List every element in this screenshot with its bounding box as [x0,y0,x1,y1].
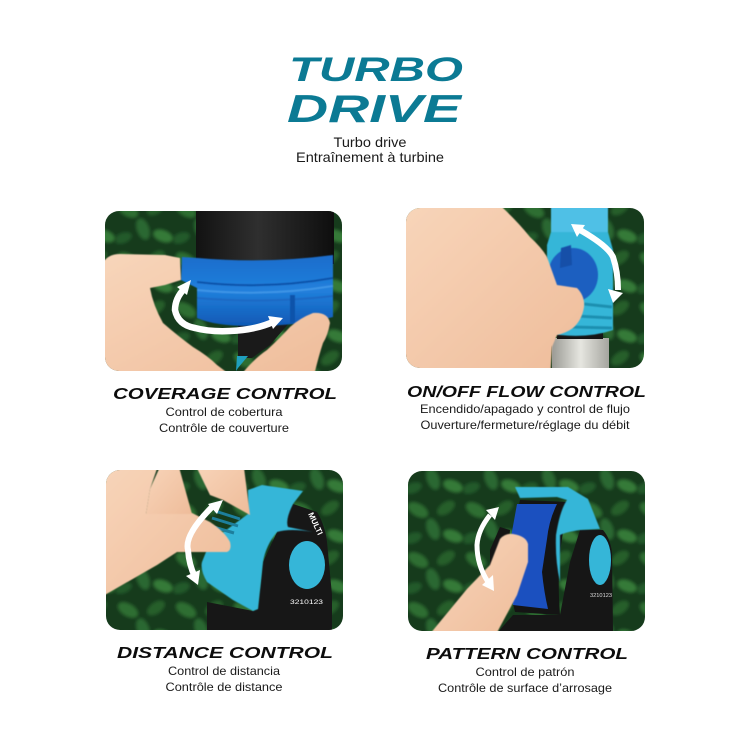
arrow: pattern [477,507,499,591]
subtitle: Turbo drive [334,134,407,150]
spout below the ring [236,322,290,371]
text: coverage control translations [159,405,289,435]
dial [289,541,325,589]
text: pattern control translations: Control de patrón [476,665,574,679]
text: distance control translations: Contrôle de distance [166,680,283,694]
panel: flow control photo [406,208,644,368]
text: flow control translations: Ouverture/fermeture/réglage du débit [420,418,630,432]
blue ring [181,255,333,326]
dial [589,535,611,585]
black band [557,333,603,339]
silver fitting [552,338,609,368]
dial numbers: 3210123 [590,593,612,599]
arrow: valve [571,224,623,303]
text: flow control translations: Encendido/apagado y control de flujo [420,402,630,416]
valve body [547,200,613,336]
finger [432,533,529,631]
light blue deflector [515,487,600,582]
text: pattern control translations [438,665,612,695]
panel: distance control photo [106,470,343,630]
hand [95,254,330,380]
subtitle: Entraînement à turbine [296,149,444,165]
panel: coverage control photo [105,211,342,371]
blue pattern wheel [512,504,557,609]
title: DRIVE [287,88,462,131]
text: pattern control translations: Contrôle de surface d’arrosage [438,681,612,695]
heading: distance control: DISTANCE CONTROL [117,645,333,662]
arrow: rotate ring [175,280,283,331]
text: coverage control translations: Control de cobertura [166,405,283,419]
black wheel rim [513,500,566,615]
hand [406,208,585,368]
subtitle [296,134,444,165]
black housing [490,527,613,632]
heading: on/off flow control: ON/OFF FLOW CONTROL [407,384,646,401]
heading: pattern control: PATTERN CONTROL [426,646,628,663]
black housing [207,504,332,632]
blue valve knob [548,245,598,302]
black cylinder [196,211,334,264]
dial label: MULTI [306,511,324,536]
arrow: deflector [186,500,223,585]
heading: coverage control: COVERAGE CONTROL [113,386,337,403]
dial numbers: 3210123 [290,599,323,606]
text: coverage control translations: Contrôle de couverture [159,421,289,435]
deflector ribs [210,511,240,533]
title: TURBO [289,51,463,89]
text: distance control translations: Control de distancia [168,664,280,678]
panel: pattern control photo [408,471,645,631]
title [287,51,463,131]
text: flow control translations [420,402,630,432]
hand [106,470,251,596]
text: distance control translations [166,664,283,694]
light blue deflector [202,485,313,611]
